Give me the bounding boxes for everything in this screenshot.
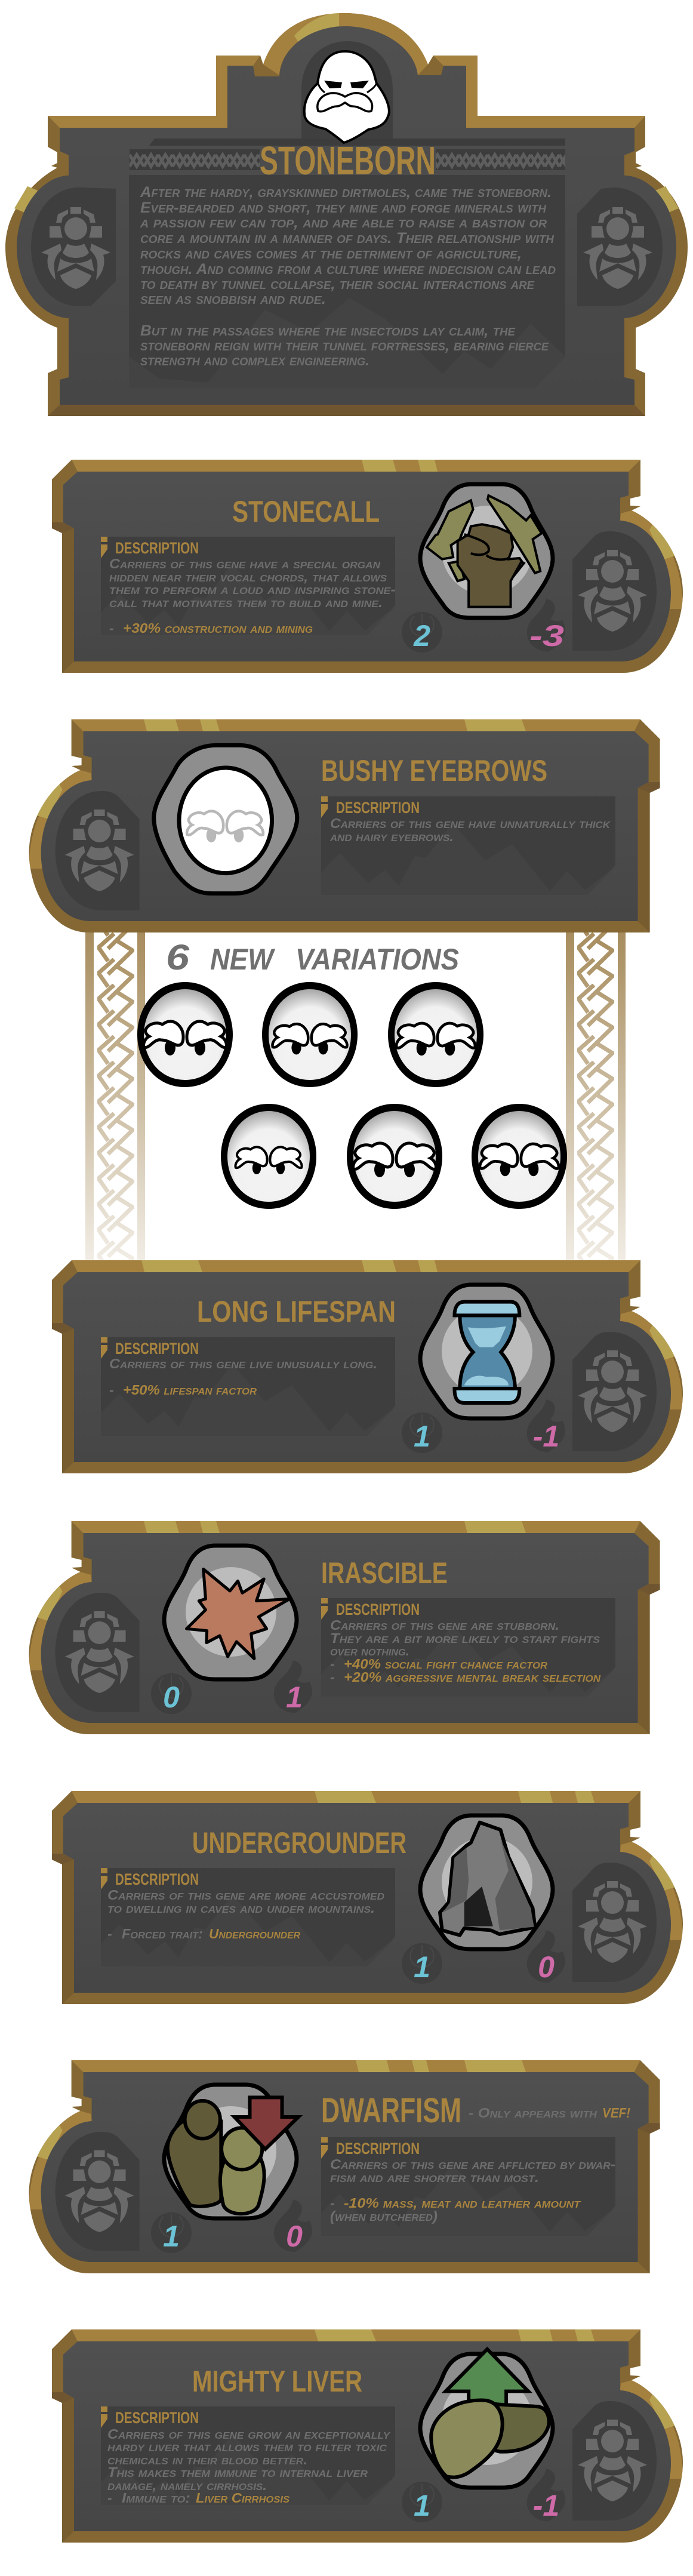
description text: and hairy eyebrows. bbox=[329, 829, 454, 844]
description text bbox=[330, 1617, 600, 1685]
frame highlights bbox=[315, 1791, 595, 1803]
description label: DESCRIPTION bbox=[336, 799, 420, 817]
face variation 5 bbox=[347, 1104, 442, 1209]
description text: - bbox=[109, 620, 114, 636]
heading: STONECALL bbox=[232, 495, 380, 528]
badge: metabolism: 0 bbox=[538, 1950, 555, 1984]
description text: damage, namely cirrhosis. bbox=[107, 2477, 267, 2493]
panel: irascible bbox=[26, 1521, 660, 1734]
frame highlights bbox=[144, 719, 526, 731]
description text: Immune to: bbox=[122, 2490, 190, 2506]
lore text: strength and complex engineering. bbox=[140, 352, 369, 369]
description text: hardy liver that allows them to filter toxic bbox=[107, 2439, 387, 2454]
description box bbox=[101, 1868, 395, 1966]
arch niche bbox=[301, 41, 393, 139]
requirement note: VEF! bbox=[602, 2105, 630, 2120]
description text: -10% mass, meat and leather amount bbox=[344, 2195, 581, 2211]
heading: IRASCIBLE bbox=[321, 1556, 448, 1590]
description text: - bbox=[330, 1656, 335, 1672]
description text: (when butchered) bbox=[330, 2208, 438, 2224]
badge: metabolism: -1 bbox=[533, 1420, 559, 1453]
icon: fist with picks bbox=[420, 484, 553, 618]
face variation 1 bbox=[137, 982, 233, 1087]
badge: complexity bbox=[402, 1943, 442, 1984]
long lifespan frame bbox=[52, 1260, 686, 1473]
description text bbox=[330, 2156, 615, 2224]
badge: complexity: 1 bbox=[414, 1950, 430, 1984]
lore text: core a mountain in a manner of days. Their relationship with bbox=[140, 230, 555, 247]
badge: complexity bbox=[151, 2212, 192, 2253]
badge: metabolism: -1 bbox=[533, 2489, 559, 2522]
bushy eyebrows frame bbox=[26, 719, 660, 932]
badge: metabolism: 0 bbox=[286, 2220, 303, 2253]
icon: anger burst bbox=[164, 1546, 297, 1679]
description text bbox=[107, 1887, 384, 1941]
badge: complexity: 1 bbox=[163, 2220, 180, 2253]
frame highlights bbox=[141, 1260, 438, 1272]
lore text: But in the passages where the insectoids lay claim, the bbox=[140, 322, 516, 339]
badge: metabolism bbox=[527, 1399, 565, 1453]
description label: DESCRIPTION bbox=[336, 1601, 420, 1618]
badge: metabolism bbox=[527, 2469, 565, 2522]
face variation 2 bbox=[262, 982, 358, 1087]
title: STONEBORN bbox=[260, 139, 436, 183]
heading: UNDERGROUNDER bbox=[192, 1826, 406, 1860]
badge: complexity: 0 bbox=[163, 1681, 180, 1714]
description text: call that motivates them to build and mine. bbox=[109, 595, 383, 610]
frame highlights bbox=[315, 2329, 595, 2341]
description text: - bbox=[107, 1926, 112, 1941]
panel: bushy eyebrows bbox=[26, 719, 660, 932]
description text: Undergrounder bbox=[209, 1926, 300, 1941]
panel: dwarfism bbox=[26, 2060, 660, 2273]
irascible frame bbox=[26, 1521, 660, 1734]
description text bbox=[329, 815, 611, 844]
lore text: a passion few can top, and are able to raise a bastion or bbox=[140, 214, 547, 231]
description box bbox=[101, 1337, 395, 1436]
panel: stoneborn header bbox=[5, 13, 688, 416]
panel: stonecall bbox=[52, 460, 686, 673]
icon: cave rock bbox=[420, 1815, 553, 1949]
frame highlights bbox=[356, 2060, 526, 2072]
description text: They are a bit more likely to start fights bbox=[330, 1630, 600, 1646]
description text: +30% construction and mining bbox=[123, 620, 313, 636]
lore text: stoneborn reign with their tunnel fortresses, bearing fierce bbox=[140, 337, 549, 354]
badge: complexity bbox=[402, 2482, 442, 2522]
decoration: right chain column bbox=[566, 932, 626, 1260]
badge: complexity: 2 bbox=[413, 619, 430, 653]
dwarfism frame bbox=[26, 2060, 660, 2273]
knotwork title band bbox=[130, 139, 565, 170]
right emblem bbox=[577, 187, 663, 306]
description text: - bbox=[330, 2195, 335, 2211]
left emblem bbox=[31, 187, 116, 306]
requirement note: - Only appears with bbox=[469, 2105, 597, 2120]
description text: - bbox=[107, 2490, 112, 2506]
description label: DESCRIPTION bbox=[115, 539, 199, 557]
description text box bbox=[129, 175, 565, 388]
description text: +40% social fight chance factor bbox=[344, 1656, 547, 1672]
description text: Carriers of this gene have unnaturally thick bbox=[330, 815, 611, 831]
badge: metabolism: -3 bbox=[529, 619, 564, 653]
description text: Carriers of this gene live unusually long. bbox=[109, 1356, 377, 1371]
badge: complexity: 1 bbox=[414, 1420, 430, 1453]
description label: DESCRIPTION bbox=[336, 2140, 420, 2158]
badge: complexity bbox=[402, 1412, 442, 1453]
icon: bearded stoneborn face bbox=[304, 51, 389, 143]
description text: to dwelling in caves and under mountains. bbox=[107, 1900, 375, 1916]
face variation 6 bbox=[472, 1104, 567, 1209]
description label: DESCRIPTION bbox=[115, 2409, 199, 2427]
face variation 4 bbox=[221, 1104, 316, 1209]
lore text bbox=[140, 184, 556, 369]
frame highlights bbox=[144, 1521, 526, 1533]
description text bbox=[109, 556, 396, 636]
description text: hidden near their vocal chords, that allows bbox=[109, 569, 387, 584]
badge: metabolism bbox=[274, 1660, 312, 1714]
badge: complexity bbox=[402, 612, 442, 653]
panel: undergrounder bbox=[52, 1791, 686, 2004]
description text: Forced trait: bbox=[122, 1926, 203, 1941]
description text: +50% lifespan factor bbox=[123, 1382, 257, 1398]
badge: metabolism bbox=[274, 2199, 312, 2253]
icon: short figures with arrow bbox=[164, 2085, 298, 2218]
variation faces bbox=[137, 982, 567, 1209]
frame highlights bbox=[362, 460, 438, 472]
description text: Carriers of this gene grow an exceptionally bbox=[107, 2426, 390, 2442]
icon: eyebrows on face bbox=[154, 745, 297, 894]
heading: DWARFISM bbox=[321, 2091, 461, 2130]
panel: long lifespan bbox=[52, 1260, 686, 1473]
description box bbox=[101, 537, 395, 635]
description label: DESCRIPTION bbox=[115, 1340, 199, 1358]
lore text: After the hardy, grayskinned dirtmoles, came the stoneborn. bbox=[140, 184, 552, 201]
badge: complexity bbox=[151, 1673, 192, 1714]
badge: complexity: 1 bbox=[414, 2489, 430, 2522]
heading: six new variations bbox=[166, 937, 459, 977]
undergrounder frame bbox=[52, 1791, 686, 2004]
heading: six new variations: VARIATIONS bbox=[295, 943, 459, 976]
description text: chemicals in their blood better. bbox=[107, 2452, 307, 2467]
lore text: Ever-bearded and short, they mine and forge minerals with bbox=[140, 199, 547, 216]
description text: Carriers of this gene are more accustomed bbox=[107, 1887, 384, 1903]
description text bbox=[107, 2426, 390, 2506]
lore text: though. And coming from a culture where indecision can lead bbox=[140, 261, 556, 278]
description text: Carriers of this gene are stubborn. bbox=[330, 1617, 559, 1633]
description text bbox=[109, 1356, 377, 1398]
description text: This makes them immune to internal liver bbox=[107, 2464, 368, 2480]
mighty liver frame bbox=[52, 2329, 686, 2543]
decoration: left chain column bbox=[85, 932, 145, 1260]
description text: Liver Cirrhosis bbox=[196, 2490, 289, 2506]
icon: liver with arrow bbox=[420, 2349, 553, 2488]
description box bbox=[321, 1598, 615, 1697]
heading: MIGHTY LIVER bbox=[192, 2365, 362, 2398]
description box bbox=[321, 2137, 615, 2236]
face variation 3 bbox=[388, 982, 483, 1087]
description text: Carriers of this gene are afflicted by dwar- bbox=[330, 2156, 615, 2172]
heading: six new variations: 6 bbox=[166, 937, 190, 977]
icon: hourglass bbox=[420, 1285, 553, 1418]
description text: - bbox=[330, 1669, 335, 1685]
badge: metabolism bbox=[527, 599, 565, 653]
lore text: seen as snobbish and rude. bbox=[140, 291, 326, 307]
lore text: to death by tunnel collapse, their social interactions are bbox=[140, 276, 535, 293]
heading: BUSHY EYEBROWS bbox=[321, 754, 547, 787]
description box bbox=[101, 2406, 395, 2505]
heading: six new variations: NEW bbox=[210, 943, 275, 976]
panel: mighty liver bbox=[52, 2329, 686, 2543]
description text: - bbox=[109, 1382, 114, 1398]
badge: metabolism: 1 bbox=[286, 1681, 303, 1714]
description text: them to perform a loud and inspiring stone- bbox=[109, 581, 396, 597]
header gold frame bbox=[5, 13, 688, 416]
description text: +20% aggressive mental break selection bbox=[344, 1669, 600, 1685]
lore text: rocks and caves comes at the detriment of agriculture, bbox=[140, 245, 522, 262]
description label: DESCRIPTION bbox=[115, 1870, 199, 1888]
stonecall frame bbox=[52, 460, 686, 673]
description text: fism and are shorter than most. bbox=[330, 2169, 539, 2185]
description box bbox=[321, 796, 615, 895]
badge: metabolism bbox=[527, 1930, 565, 1984]
description text: over nothing. bbox=[330, 1643, 409, 1658]
header stone body bbox=[17, 26, 676, 405]
description text: Carriers of this gene have a special organ bbox=[109, 556, 380, 571]
heading: LONG LIFESPAN bbox=[197, 1295, 396, 1328]
